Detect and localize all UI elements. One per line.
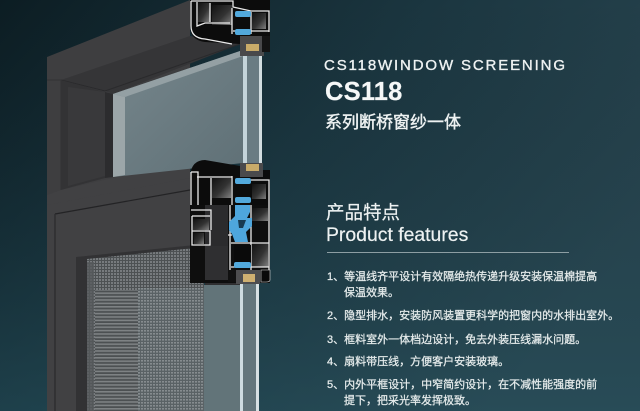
frame face: [47, 0, 190, 411]
feature 1: 保温效果。: [344, 285, 399, 299]
feature 3: 3、框料室外一体档边设计，免去外装压线漏水问题。: [327, 332, 586, 346]
window illustration: [47, 0, 270, 411]
middle cross-section profile: [190, 160, 270, 205]
subtitle: English: CS118WINDOW SCREENING: [324, 57, 566, 74]
heading block: [324, 57, 566, 132]
lower cross-section profile: [190, 205, 270, 284]
feature 2: 2、隐型排水，安装防风装置更科学的把窗内的水排出室外。: [327, 308, 619, 322]
feature 5: 提下，把采光率发挥极致。: [344, 393, 476, 407]
top cross-section profile: [190, 0, 270, 56]
title: CS118: CS118: [325, 78, 403, 106]
feature 1: 1、等温线齐平设计有效隔绝热传递升级安装保温棉提高: [327, 269, 597, 283]
product features heading: 产品特点: [326, 202, 400, 223]
upper glass: [105, 50, 243, 178]
product features heading: Product features: [326, 224, 468, 246]
upper glazing panes section: [243, 55, 262, 165]
subtitle: Chinese: 系列断桥窗纱一体: [325, 113, 461, 132]
lower sash face: [47, 178, 240, 411]
lower glass: [204, 284, 259, 411]
feature list: [327, 269, 619, 407]
feature 5: [327, 377, 597, 407]
feature 4: 4、扇料带压线，方便客户安装玻璃。: [327, 354, 509, 368]
feature 1: [327, 269, 597, 299]
product features heading: [326, 202, 468, 246]
feature 5: 5、内外平框设计，中窄简约设计，在不减性能强度的前: [327, 377, 597, 391]
insect screen mesh: [87, 247, 204, 411]
upper frame reveal: [47, 36, 240, 208]
